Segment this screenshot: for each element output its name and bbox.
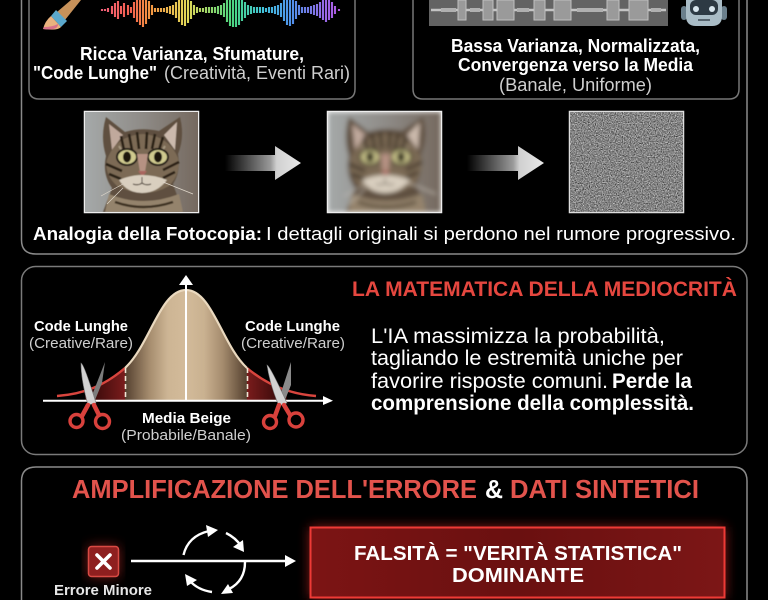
text: human caption: (Creatività, Eventi Rari) [164,63,350,83]
text: human caption [33,44,350,83]
label: right long tail [241,318,345,352]
label: right long tail: (Creative/Rare) [241,335,345,352]
arrow: sharp to blurred [225,146,301,180]
text: AI caption: Bassa Varianza, Normalizzata, [451,36,700,56]
text: AI caption: (Banale, Uniforme) [499,75,652,95]
icon: right scissors [264,362,303,428]
label: left long tail: Code Lunghe [34,318,128,335]
image: pure noise [570,112,684,212]
panel: human variance [29,0,355,99]
callout: falsehood becomes statistical truth: FALSITÀ = "VERITÀ STATISTICA" [354,542,682,565]
heading: error amplification and synthetic data [72,476,699,504]
image: blurred cat photo [328,112,442,212]
heading: error amplification and synthetic data: & [485,476,503,504]
arrow: error to dominant falsehood [131,555,296,567]
arrow: blurred to noise [467,146,544,180]
text: explanation: tagliando le estremità uniche per [371,347,683,370]
heading: error amplification and synthetic data: DATI SINTETICI [510,476,699,504]
label: left long tail: (Creative/Rare) [29,335,133,352]
icon: feedback loop arrows [184,525,245,594]
chart: bell curve with cut tails [43,275,333,405]
text: explanation: comprensione della complessità. [371,392,694,415]
callout: falsehood becomes statistical truth: DOMINANTE [452,564,584,587]
text: photocopy analogy: I dettagli originali si perdono nel rumore progressivo. [266,223,736,244]
icon: left scissors [70,362,110,428]
chart: colourful waveform [102,0,339,27]
text: AI caption [451,36,700,95]
heading: error amplification and synthetic data: AMPLIFICAZIONE DELL'ERRORE [72,476,477,504]
text: explanation: favorire risposte comuni. [371,370,608,393]
text: explanation: L'IA massimizza la probabilità, [371,325,665,348]
label: minor error: Errore Minore [54,583,152,599]
label: beige mean [121,410,251,444]
heading: mathematics of mediocrity: LA MATEMATICA DELLA MEDIOCRITÀ [352,278,737,301]
label: beige mean: (Probabile/Banale) [121,427,251,444]
panel: human versus AI comparison [22,0,747,254]
text: photocopy analogy [33,223,736,244]
text: human caption: Ricca Varianza, Sfumature, [80,44,304,64]
panel: AI variance [413,0,739,99]
label: right long tail: Code Lunghe [245,318,340,335]
text: explanation: Perde la [612,370,692,393]
text: explanation [371,325,694,415]
callout: falsehood becomes statistical truth [310,527,725,598]
panel: mathematics of mediocrity [22,266,747,454]
text: photocopy analogy: Analogia della Fotocopia: [33,223,262,244]
image: sharp cat photo [84,112,198,212]
text: AI caption: Convergenza verso la Media [458,55,694,75]
label: left long tail [29,318,133,352]
icon: robot [681,0,727,26]
panel: error amplification [22,467,747,600]
icon: minor error [88,546,119,577]
chart: flat grey waveform [429,0,668,26]
text: human caption: "Code Lunghe" [33,63,157,83]
label: beige mean: Media Beige [142,410,231,427]
icon: paintbrush [43,0,81,30]
